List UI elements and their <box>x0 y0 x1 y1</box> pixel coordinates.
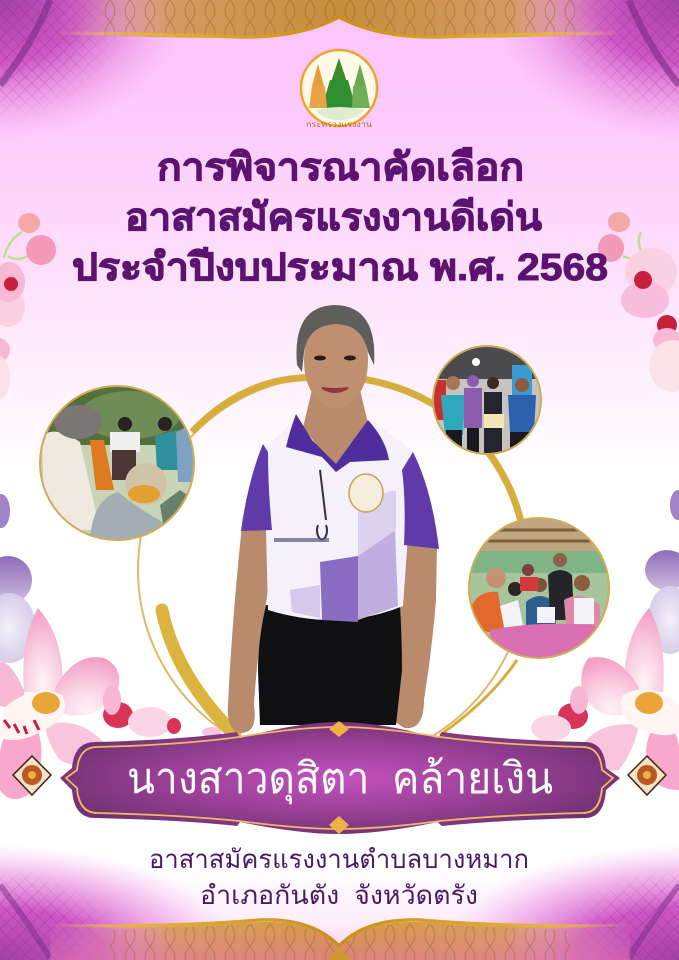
title line 2: อาสาสมัครแรงงานดีเด่น <box>125 197 542 239</box>
collar <box>286 414 389 472</box>
name banner <box>60 721 620 834</box>
ministry of labour logo: กระทรวงแรงงาน <box>306 120 373 129</box>
trousers <box>258 605 402 725</box>
left large orchid <box>0 608 119 799</box>
right small orchids <box>531 686 588 741</box>
left purple buds <box>0 494 36 663</box>
right purple buds <box>645 490 679 654</box>
right large orchid <box>581 608 679 790</box>
bottom gold swag <box>45 920 635 960</box>
shirt name tag <box>274 538 329 542</box>
glasses <box>317 470 327 539</box>
bottom right lattice corner <box>466 850 679 960</box>
right upper buds and stem <box>598 212 679 392</box>
top right lattice corner <box>514 0 679 128</box>
activity photo: cooking group <box>39 385 196 541</box>
banner top ornament <box>329 721 349 737</box>
arms <box>228 525 437 733</box>
facial features <box>314 356 356 392</box>
top gold swag <box>55 0 624 38</box>
activity photo: group with documents <box>468 517 610 660</box>
left orchid cluster <box>0 213 222 799</box>
activity photo: four women with certificates <box>432 345 542 455</box>
left small orchids <box>103 685 222 737</box>
title line 1: การพิจารณาคัดเลือก <box>157 147 524 189</box>
bottom left lattice corner <box>0 850 214 960</box>
sleeves <box>241 444 439 549</box>
title <box>72 147 608 289</box>
right orchid cluster <box>531 212 679 790</box>
title line 3: ประจำปีงบประมาณ พ.ศ. 2568 <box>72 247 608 289</box>
hair <box>296 305 374 372</box>
ministry of labour logo <box>301 50 377 129</box>
subtitle line 1: อาสาสมัครแรงงานตำบลบางหมาก <box>149 844 529 874</box>
top left lattice corner <box>0 0 166 128</box>
subtitle <box>149 844 529 910</box>
gold ring <box>138 376 526 764</box>
main portrait <box>228 305 439 733</box>
shirt body <box>264 418 414 620</box>
right diamond ornament <box>628 756 666 795</box>
left upper buds and stem <box>0 213 56 400</box>
shirt badge <box>349 474 383 512</box>
left diamond ornament <box>13 756 51 795</box>
banner bottom ornament <box>329 816 349 834</box>
subtitle line 2: อำเภอกันตัง จังหวัดตรัง <box>200 880 478 910</box>
shirt purple panels <box>290 490 398 622</box>
neck <box>300 390 372 470</box>
face <box>304 320 368 410</box>
name text: นางสาวดุสิตา คล้ายเงิน <box>127 755 553 805</box>
